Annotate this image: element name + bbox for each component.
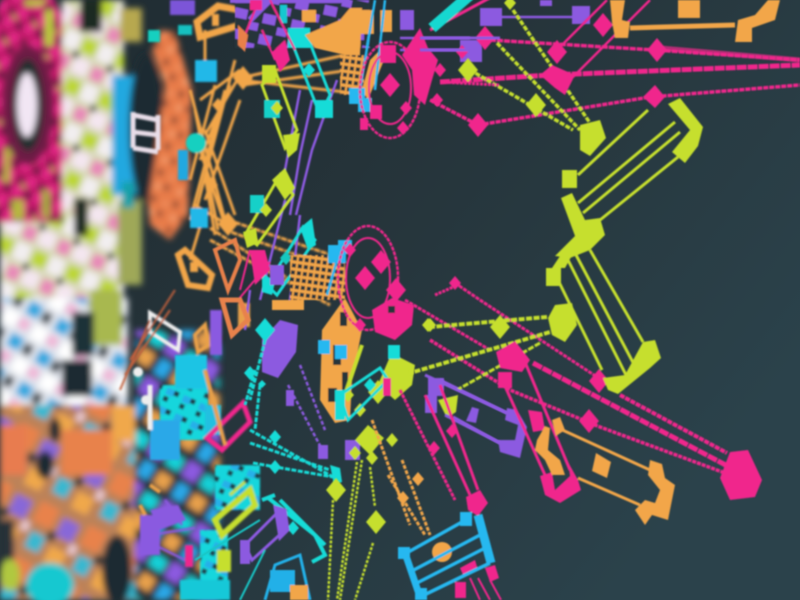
capsule: pink lower left: [207, 403, 250, 450]
capsule: cyan top: [280, 5, 333, 118]
lime dashed lines from hub: [410, 317, 557, 390]
purple blocks top and centre: [262, 0, 590, 460]
capsule: cyan inside lime cluster: [335, 345, 400, 420]
blue arcs bottom: [265, 555, 310, 600]
coral lines: [120, 290, 175, 390]
right network layer: [326, 0, 800, 600]
dark holes in orange mass: [328, 312, 348, 402]
icon: orange node top: [233, 66, 253, 90]
mixed mass lower: [135, 330, 220, 600]
cyan diamonds: [244, 318, 342, 485]
capsule: cyan middle: [262, 218, 316, 295]
top right: pink rails: [430, 0, 800, 125]
capsule: pink: [496, 341, 581, 503]
orange lower mass: [272, 255, 362, 423]
pink lines to big node: [405, 283, 735, 473]
lower left cluster: [0, 290, 140, 600]
blue markers by rings: [318, 0, 385, 359]
lime cluster: [342, 318, 434, 465]
orange marks lower: [140, 305, 248, 515]
capsule: lime lower left: [185, 482, 255, 572]
purple dense band top: [235, 0, 370, 48]
pink marks near top centre: [215, 0, 295, 335]
capsule: cyan bottom: [398, 512, 491, 600]
capsule: purple: [425, 375, 527, 458]
icon: cyan and blue nodes: [148, 0, 217, 228]
lime dotted lines bottom: [328, 460, 375, 600]
centre network layer: [195, 0, 590, 600]
blue and coral band: [112, 30, 192, 240]
dashed cyan and orange faint lines: [195, 520, 265, 600]
cyan strands: [245, 340, 333, 477]
capsule: lime top: [262, 65, 300, 158]
pink and lime near top left of rails: [420, 38, 500, 85]
pink lines to cyan capsule: [400, 385, 478, 500]
pink node above cyan capsule: [428, 424, 488, 516]
cyan band top: [432, 0, 470, 28]
mid-left network layer: [120, 0, 350, 600]
capsule: orange top right: [610, 0, 780, 42]
orange circle behind capsule: [432, 542, 452, 562]
ring node upper pink: [360, 42, 420, 138]
pink diamonds: [449, 276, 609, 433]
pink diamonds top: [456, 13, 667, 137]
purple strands: [230, 0, 573, 455]
orange diamonds: [397, 472, 424, 505]
capsule: lime lower right: [558, 250, 661, 394]
capsule: purple lower: [240, 507, 288, 564]
capsule: white lower: [150, 313, 180, 350]
pink cross blob top: [397, 28, 446, 135]
lime diamonds top: [458, 0, 546, 117]
far left blurred mandala: [0, 0, 220, 600]
capsule: lime upper right: [546, 98, 703, 286]
purple cluster lower: [140, 310, 222, 560]
pink rosette: [0, 0, 78, 250]
pink stub under capsule: [455, 560, 501, 600]
orange upper mass: [302, 8, 392, 100]
cyan mass lower: [150, 355, 260, 600]
capsule: orange top: [197, 6, 240, 37]
ring node lower pink: [338, 226, 414, 340]
lime diamonds bottom: [326, 478, 386, 534]
capsule: white upper: [133, 112, 158, 152]
orange hatch web: [190, 30, 350, 305]
pink big node: [720, 450, 762, 500]
lime diamonds: [424, 315, 510, 418]
lime dashed diagonals top: [470, 10, 590, 130]
white and lime speckle column: [0, 0, 142, 300]
lime hub: [548, 303, 577, 342]
capsule: cyan lower: [262, 495, 325, 562]
capsule: lime middle: [243, 168, 295, 248]
capsule: orange: [535, 417, 675, 525]
capsule: orange lower: [178, 250, 212, 288]
orange dashed lines: [372, 420, 430, 535]
